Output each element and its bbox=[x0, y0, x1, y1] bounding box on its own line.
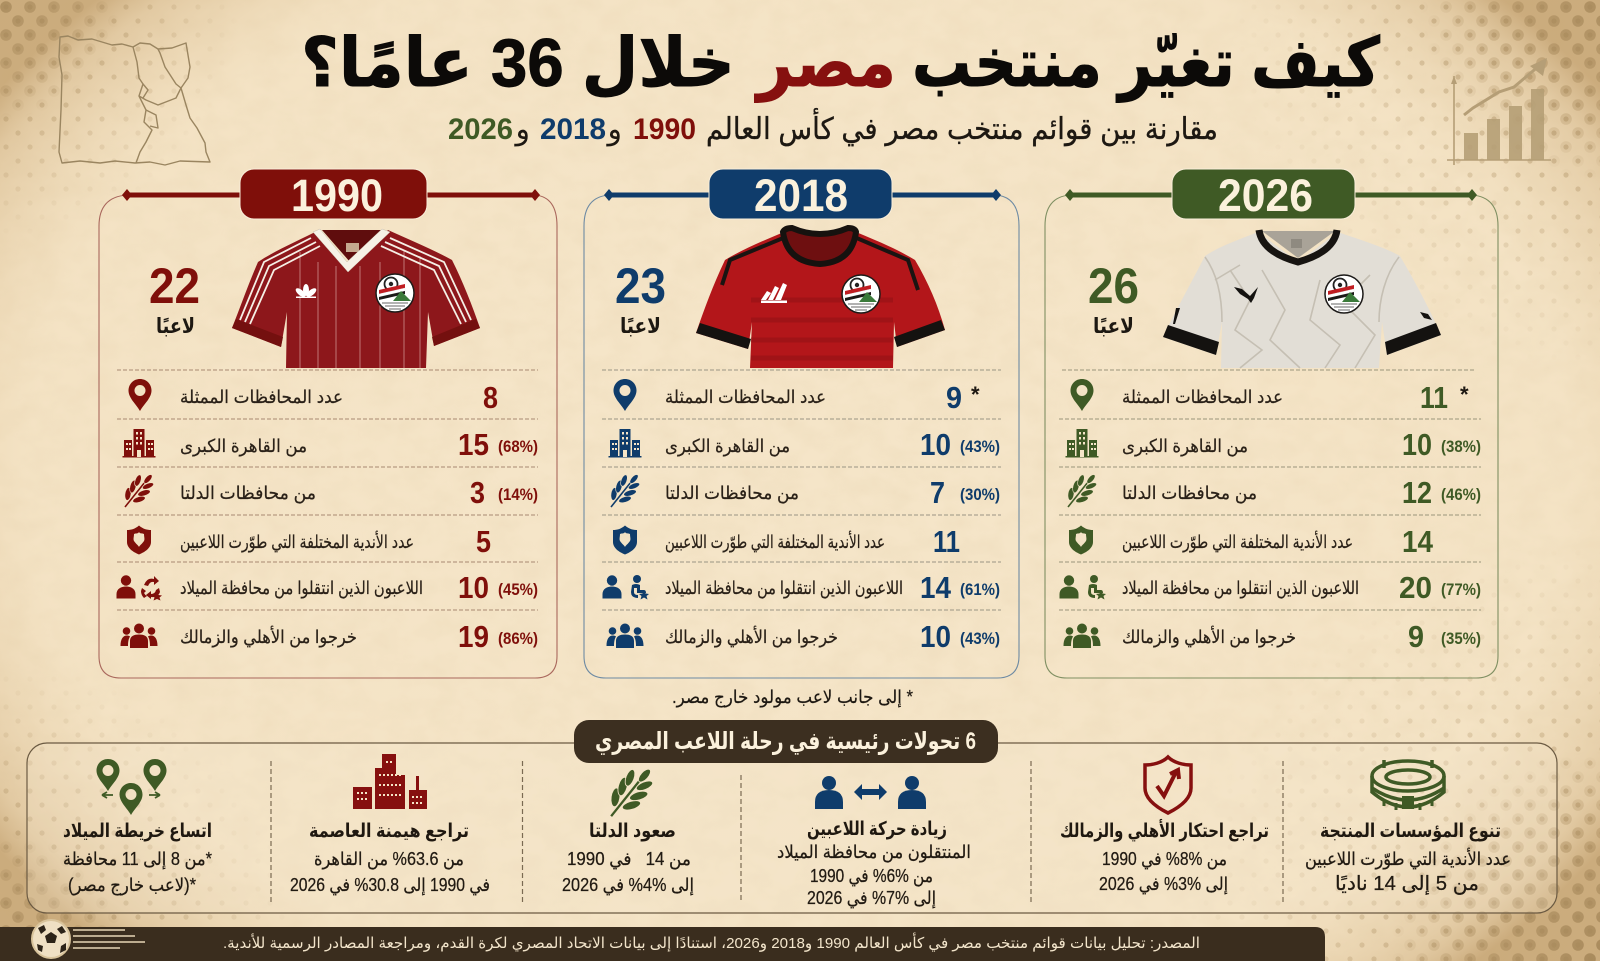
row: Ahly and Zamalek: 9 bbox=[1408, 619, 1424, 654]
title: مصر bbox=[754, 25, 896, 103]
row: Ahly and Zamalek: خرجوا من الأهلي والزمالك bbox=[180, 626, 357, 648]
column: Ahly and Zamalek monopoly decline bbox=[1060, 757, 1269, 895]
row: clubs: 11 bbox=[933, 524, 960, 559]
row: moved from birth governorate bbox=[1060, 570, 1481, 605]
column: player mobility: زيادة حركة اللاعبين bbox=[807, 819, 947, 840]
year badge bbox=[709, 169, 892, 221]
row: Ahly and Zamalek: خرجوا من الأهلي والزمالك bbox=[1122, 626, 1296, 648]
row: delta: من محافظات الدلتا bbox=[180, 483, 316, 504]
title: كيف تغيّر منتخب bbox=[912, 25, 1380, 103]
row: Ahly and Zamalek bbox=[606, 619, 1000, 654]
panel: 1990 squad bbox=[99, 169, 557, 678]
row: moved from birth governorate: اللاعبون الذين انتقلوا من محافظة الميلاد bbox=[180, 578, 423, 599]
row: governorates: 8 bbox=[483, 380, 498, 415]
row: delta bbox=[124, 473, 538, 510]
column: player mobility bbox=[777, 776, 971, 909]
column: producing institutions: من 5 إلى 14 ناديًا bbox=[1335, 873, 1479, 896]
row: clubs bbox=[613, 524, 960, 559]
subtitle: 2026 bbox=[448, 113, 513, 146]
row: clubs: عدد الأندية المختلفة التي طوّرت اللاعبين bbox=[1122, 531, 1353, 553]
row: moved from birth governorate: اللاعبون الذين انتقلوا من محافظة الميلاد bbox=[665, 578, 903, 599]
row: moved from birth governorate bbox=[602, 570, 1000, 605]
row: governorates bbox=[614, 379, 980, 415]
icon: three pins bbox=[96, 759, 166, 815]
column: birth map expansion bbox=[63, 759, 212, 896]
subtitle bbox=[448, 107, 1218, 147]
row: delta: 12 bbox=[1402, 475, 1432, 510]
subtitle: مقارنة بين قوائم منتخب مصر في كأس العالم bbox=[706, 107, 1218, 147]
column: capital dominance decline: في 1990 إلى 30.8% في 2026 bbox=[290, 875, 490, 896]
row: delta: من محافظات الدلتا bbox=[665, 483, 799, 504]
jersey 2018 bbox=[696, 228, 945, 368]
row: Ahly and Zamalek: 10 bbox=[920, 619, 951, 654]
row: greater Cairo: 10 bbox=[1402, 427, 1432, 462]
row: moved from birth governorate: اللاعبون الذين انتقلوا من محافظة الميلاد bbox=[1122, 578, 1359, 599]
panel frame bbox=[99, 195, 557, 678]
column: player mobility: إلى %7% في 2026 bbox=[807, 888, 936, 909]
row: delta bbox=[1067, 473, 1481, 510]
row: Ahly and Zamalek: خرجوا من الأهلي والزمالك bbox=[665, 626, 838, 648]
row: moved from birth governorate: (61%) bbox=[960, 580, 1000, 599]
row: Ahly and Zamalek: (86%) bbox=[498, 629, 538, 648]
row: greater Cairo: من القاهرة الكبرى bbox=[180, 436, 307, 457]
row: moved from birth governorate: 14 bbox=[920, 570, 952, 605]
year connector bbox=[122, 189, 540, 201]
row: greater Cairo: من القاهرة الكبرى bbox=[1122, 436, 1248, 457]
panel heading: 6 تحولات رئيسية في رحلة اللاعب المصري bbox=[595, 728, 976, 755]
column: delta rise: من 14 في 1990 bbox=[567, 849, 691, 870]
row: greater Cairo bbox=[1066, 427, 1481, 462]
row: delta: (30%) bbox=[960, 485, 1000, 504]
row: greater Cairo: (38%) bbox=[1441, 437, 1481, 456]
row: governorates: 11 bbox=[1420, 380, 1448, 415]
squad size: 22 bbox=[149, 258, 200, 314]
year badge bbox=[240, 169, 427, 221]
year badge: 2026 bbox=[1218, 170, 1313, 221]
panel: six shifts bbox=[27, 720, 1557, 913]
row: governorates bbox=[1070, 379, 1469, 415]
row: greater Cairo: 10 bbox=[920, 427, 951, 462]
column: capital dominance decline: تراجع هيمنة العاصمة bbox=[309, 821, 469, 842]
row: governorates: عدد المحافظات الممثلة bbox=[1122, 387, 1283, 407]
column: producing institutions: تنوع المؤسسات المنتجة bbox=[1320, 821, 1501, 842]
icon: stadium bbox=[1372, 760, 1444, 810]
year badge bbox=[1172, 169, 1355, 221]
icon: two players with arrow bbox=[815, 776, 926, 809]
column: player mobility: من %6% في 1990 bbox=[810, 866, 933, 887]
column: delta rise: إلى %4% في 2026 bbox=[562, 875, 694, 896]
squad size bbox=[149, 258, 200, 338]
icon: city skyline bbox=[353, 754, 427, 809]
row: Ahly and Zamalek bbox=[1064, 619, 1481, 654]
row: governorates: 9 bbox=[946, 380, 962, 415]
icon: wheat branch bbox=[610, 767, 654, 816]
row: moved from birth governorate: 20 bbox=[1399, 570, 1432, 605]
row: clubs: عدد الأندية المختلفة التي طوّرت اللاعبين bbox=[180, 531, 414, 553]
row: Ahly and Zamalek bbox=[120, 619, 538, 654]
panel frame bbox=[584, 195, 1019, 678]
column: delta rise: صعود الدلتا bbox=[589, 821, 676, 842]
title bbox=[301, 25, 1380, 103]
row: delta bbox=[610, 473, 1000, 510]
panel heading bbox=[574, 720, 998, 763]
source bar: المصدر: تحليل بيانات قوائم منتخب مصر في كأس العالم 1990 و2018 و2026، استنادًا إلى بيانات الاتحاد المصري لكرة القدم، ومراجعة المصادر الرسمية للأندية. bbox=[223, 932, 1200, 953]
panel frame bbox=[27, 743, 1557, 913]
row: delta: 3 bbox=[470, 475, 485, 510]
footnote: * إلى جانب لاعب مولود خارج مصر. bbox=[672, 687, 913, 708]
row: delta: (46%) bbox=[1441, 485, 1481, 504]
row: governorates: عدد المحافظات الممثلة bbox=[180, 387, 343, 407]
column: delta rise bbox=[562, 767, 694, 896]
jersey 1990 bbox=[232, 229, 480, 368]
row: governorates bbox=[128, 379, 498, 415]
subtitle: و bbox=[514, 113, 530, 147]
year connector bbox=[1065, 189, 1477, 201]
row: greater Cairo bbox=[122, 427, 538, 462]
row: delta: من محافظات الدلتا bbox=[1122, 483, 1257, 504]
row: clubs: 14 bbox=[1402, 524, 1434, 559]
panel: 2018 squad bbox=[584, 169, 1019, 678]
year connector bbox=[604, 189, 1001, 201]
squad size bbox=[1088, 258, 1139, 338]
decoration: map of Egypt outline bbox=[59, 36, 210, 165]
column: birth map expansion: *من 8 إلى 11 محافظة bbox=[63, 849, 212, 870]
row: clubs: عدد الأندية المختلفة التي طوّرت اللاعبين bbox=[665, 531, 885, 553]
squad size: 23 bbox=[615, 258, 666, 314]
panel frame bbox=[1045, 195, 1498, 678]
row: greater Cairo bbox=[608, 427, 1000, 462]
column: player mobility: المنتقلون من محافظة الميلاد bbox=[777, 842, 971, 863]
icon: football with speed lines bbox=[32, 920, 145, 958]
row: governorates: * bbox=[1460, 382, 1469, 407]
row: Ahly and Zamalek: 19 bbox=[458, 619, 489, 654]
squad size: لاعبًا bbox=[620, 315, 661, 338]
column: Ahly and Zamalek monopoly decline: تراجع احتكار الأهلي والزمالك bbox=[1060, 819, 1269, 842]
row: clubs bbox=[1069, 524, 1434, 559]
subtitle: 2018 bbox=[540, 113, 606, 146]
year badge: 2018 bbox=[754, 170, 848, 221]
icon: shield with check bbox=[1145, 757, 1191, 813]
row: Ahly and Zamalek: (43%) bbox=[960, 629, 1000, 648]
title: خلال 36 عامًا؟ bbox=[301, 25, 735, 101]
subtitle: 1990 bbox=[633, 113, 696, 146]
decoration: rising bar chart bbox=[1447, 58, 1551, 165]
column: Ahly and Zamalek monopoly decline: إلى %3% في 2026 bbox=[1099, 874, 1228, 895]
column: producing institutions bbox=[1305, 760, 1511, 896]
squad size: لاعبًا bbox=[1093, 315, 1134, 338]
row: moved from birth governorate: (77%) bbox=[1441, 580, 1481, 599]
row: governorates: عدد المحافظات الممثلة bbox=[665, 387, 826, 407]
row: greater Cairo: 15 bbox=[458, 427, 489, 462]
column: Ahly and Zamalek monopoly decline: من %8% في 1990 bbox=[1102, 849, 1227, 870]
column: capital dominance decline: من 63.6% من القاهرة bbox=[314, 849, 464, 870]
row: clubs: 5 bbox=[476, 524, 491, 559]
row: greater Cairo: (43%) bbox=[960, 437, 1000, 456]
row: greater Cairo: (68%) bbox=[498, 437, 538, 456]
squad size: 26 bbox=[1088, 258, 1139, 314]
row: moved from birth governorate bbox=[116, 570, 538, 605]
row: delta: (14%) bbox=[498, 485, 538, 504]
year badge: 1990 bbox=[291, 170, 383, 221]
column: capital dominance decline bbox=[290, 754, 490, 896]
squad size: لاعبًا bbox=[156, 315, 195, 338]
row: moved from birth governorate: 10 bbox=[458, 570, 489, 605]
row: delta: 7 bbox=[930, 475, 945, 510]
row: clubs bbox=[127, 524, 491, 559]
row: governorates: * bbox=[971, 382, 980, 407]
panel: 2026 squad bbox=[1045, 169, 1498, 678]
column: birth map expansion: اتساع خريطة الميلاد bbox=[63, 821, 212, 842]
subtitle: و bbox=[606, 113, 622, 147]
row: moved from birth governorate: (45%) bbox=[498, 580, 538, 599]
row: Ahly and Zamalek: (35%) bbox=[1441, 629, 1481, 648]
jersey 2026 bbox=[1163, 230, 1441, 368]
row: greater Cairo: من القاهرة الكبرى bbox=[665, 436, 790, 457]
column: birth map expansion: *(لاعب خارج مصر) bbox=[68, 875, 196, 896]
squad size bbox=[615, 258, 666, 338]
source bar bbox=[0, 920, 1325, 961]
column: producing institutions: عدد الأندية التي طوّرت اللاعبين bbox=[1305, 848, 1511, 870]
